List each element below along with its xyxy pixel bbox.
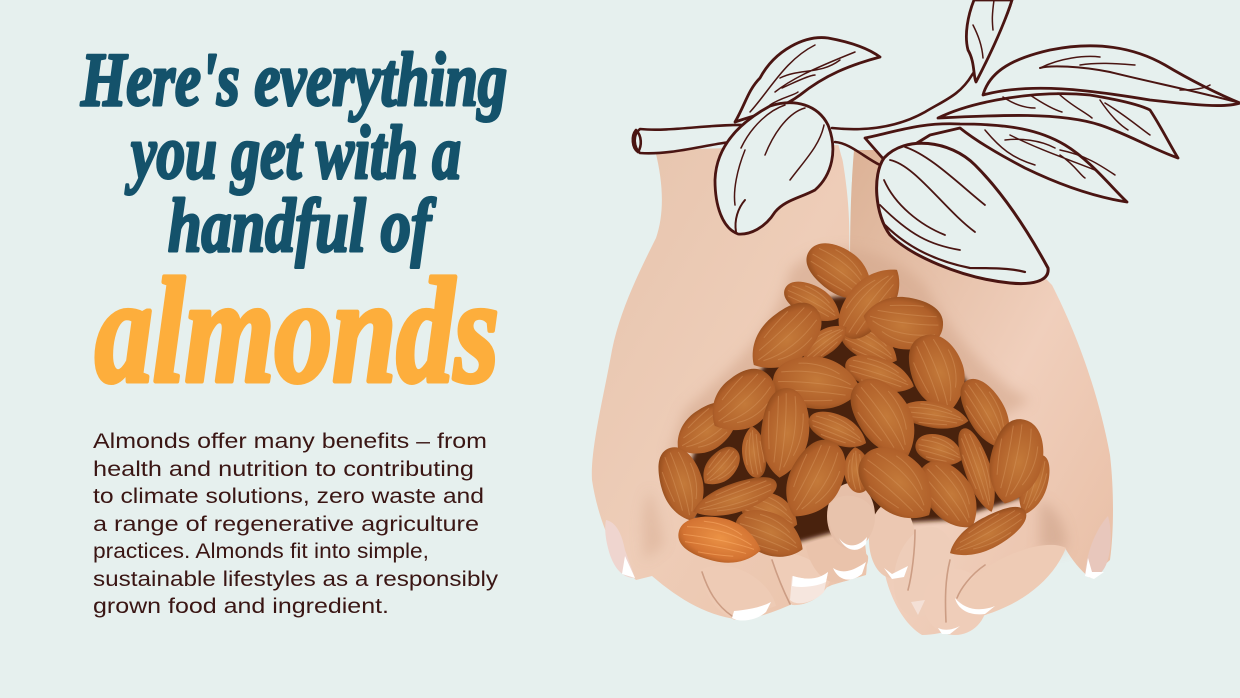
- title: you get with a: [125, 111, 461, 195]
- title: almonds: [95, 248, 499, 414]
- fingers behind almonds: [700, 483, 1066, 635]
- shadow under the almonds: [680, 296, 1030, 550]
- leaf: middle right: [938, 94, 1178, 158]
- leaf: top: [966, 0, 1012, 82]
- fingertips and nails: [605, 496, 1111, 634]
- leaf: upper right: [983, 46, 1240, 106]
- right hand: [850, 150, 1113, 635]
- almond fruit: right: [877, 143, 1048, 284]
- body text: to climate solutions, zero waste and: [93, 485, 484, 508]
- title: [80, 38, 507, 414]
- body text: a range of regenerative agriculture: [93, 513, 479, 536]
- body text: [93, 430, 499, 618]
- palm shading: [642, 249, 1066, 560]
- body text: sustainable lifestyles as a responsibly: [93, 568, 499, 591]
- left hand: [592, 145, 867, 620]
- title: handful of: [168, 184, 436, 268]
- botanical line drawing: almond branch: [633, 0, 1240, 284]
- stem: [635, 125, 745, 153]
- nail: left thumb: [605, 520, 635, 578]
- leaf: top left: [735, 38, 880, 122]
- nail: right thumb: [1085, 516, 1111, 577]
- branch: [832, 0, 1012, 129]
- cupped hands: [592, 143, 1113, 635]
- body text: grown food and ingredient.: [93, 595, 389, 618]
- leaf: lower right: [865, 124, 1127, 202]
- almonds: [652, 231, 1056, 571]
- title: Here's everything: [80, 38, 507, 122]
- almond fruit: left: [715, 103, 833, 234]
- bare gap between the hands: [838, 143, 852, 182]
- body text: Almonds offer many benefits – from: [93, 430, 487, 453]
- body text: health and nutrition to contributing: [93, 458, 474, 481]
- body text: practices. Almonds fit into simple,: [93, 540, 429, 563]
